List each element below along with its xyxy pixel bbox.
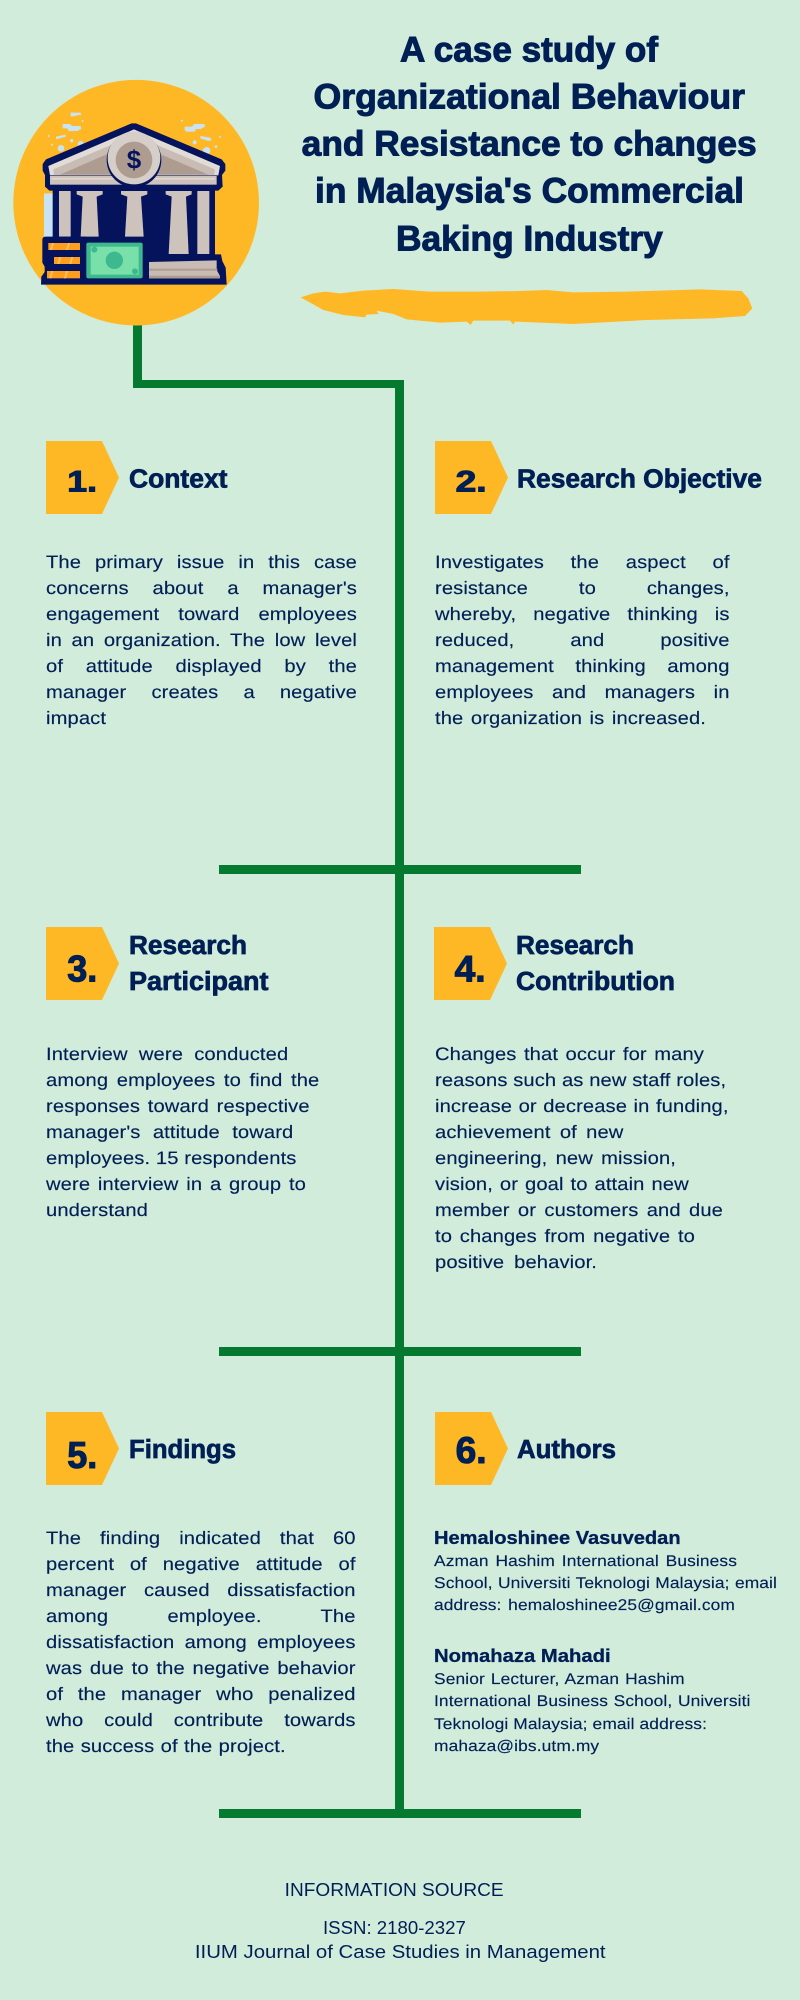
title: Organizational Behaviour xyxy=(314,77,745,116)
text: research participant body: among employees to find the xyxy=(46,1070,319,1090)
footer: information source: IIUM Journal of Case Studies in Management xyxy=(195,1942,606,1962)
text: research participant body: were interview in a group to xyxy=(46,1174,306,1194)
text: second author affiliation: International Business School, Universiti xyxy=(434,1693,750,1710)
text: research contribution body: Changes that occur for many xyxy=(435,1044,704,1064)
icon: columns xyxy=(59,191,209,254)
panel: research objective xyxy=(434,441,762,728)
icon: dollar medallion: $ xyxy=(127,145,142,175)
panel: findings xyxy=(46,1412,356,1756)
text: research participant body: manager's attitude toward xyxy=(46,1122,293,1142)
text: research participant body xyxy=(46,1044,319,1220)
footer: information source: ISSN: 2180-2327 xyxy=(323,1918,466,1938)
panel: authors xyxy=(434,1412,777,1755)
text: findings body: among employee. The xyxy=(46,1606,356,1626)
text: research participant body: responses toward respective xyxy=(46,1096,310,1116)
badge: number 1: 1. xyxy=(67,466,97,499)
heading: Research Objective: Research Objective xyxy=(517,466,762,494)
text: context body: impact xyxy=(46,708,106,728)
panel: context xyxy=(46,441,357,728)
text: research participant body: understand xyxy=(46,1200,148,1220)
text: first author affiliation xyxy=(434,1553,777,1614)
heading: Research Contribution xyxy=(516,932,675,996)
text: research contribution body: positive behavior. xyxy=(435,1252,597,1272)
text: research objective body: employees and managers in xyxy=(435,682,730,702)
text: context body: of attitude displayed by the xyxy=(46,656,357,676)
text: research objective body xyxy=(434,552,730,728)
heading: Authors: Authors xyxy=(517,1436,616,1464)
badge: number 2: 2. xyxy=(456,466,487,499)
text: research objective body: reduced, and positive xyxy=(435,630,730,650)
badge: number 5: 5. xyxy=(67,1435,97,1476)
icon: steps xyxy=(149,260,220,278)
heading: Research Contribution: Contribution xyxy=(516,968,675,996)
badge: number 4: 4. xyxy=(455,949,486,990)
text: context body: The primary issue in this case xyxy=(46,552,357,572)
icon: dollar medallion xyxy=(107,132,161,187)
text: research contribution body: increase or decrease in funding, xyxy=(435,1096,729,1116)
heading: Findings: Findings xyxy=(129,1436,236,1464)
footer: information source: INFORMATION SOURCE xyxy=(285,1880,504,1900)
text: research contribution body: member or customers and due xyxy=(435,1200,723,1220)
text: context body: manager creates a negative xyxy=(46,682,357,702)
title: and Resistance to changes xyxy=(302,125,757,164)
text: context body xyxy=(46,552,357,728)
icon: base with money xyxy=(41,237,227,285)
text: second author affiliation: Senior Lecturer, Azman Hashim xyxy=(434,1671,685,1688)
text: findings body: percent of negative attitude of xyxy=(46,1554,356,1574)
text: context body: engagement toward employees xyxy=(46,604,357,624)
text: research objective body: resistance to changes, xyxy=(435,578,730,598)
text: research contribution body: engineering, new mission, xyxy=(435,1148,676,1168)
icon: small clouds xyxy=(44,113,221,238)
badge: number 3 xyxy=(46,927,119,1000)
author name: Hemaloshinee Vasuvedan: Hemaloshinee Vasuvedan xyxy=(434,1528,681,1548)
heading: Context: Context xyxy=(129,466,228,494)
icon: coin stack xyxy=(47,243,80,278)
text: findings body: The finding indicated that 60 xyxy=(46,1528,356,1548)
text: research objective body: management thinking among xyxy=(435,656,730,676)
brush stroke underline xyxy=(300,289,752,325)
text: research contribution body xyxy=(435,1044,729,1272)
icon: banknote xyxy=(86,243,143,278)
text: research objective body: whereby, negative thinking is xyxy=(435,604,730,624)
text: first author affiliation: School, Universiti Teknologi Malaysia; email xyxy=(434,1575,777,1592)
text: second author affiliation xyxy=(434,1671,750,1755)
heading: Research Contribution: Research xyxy=(516,932,634,960)
heading: Research Participant xyxy=(129,932,269,996)
panel: research participant xyxy=(46,927,319,1220)
text: research participant body: employees. 15 respondents xyxy=(46,1148,296,1168)
text: first author affiliation: Azman Hashim International Business xyxy=(434,1553,737,1570)
text: research contribution body: to changes from negative to xyxy=(435,1226,695,1246)
text: findings body: of the manager who penalized xyxy=(46,1684,356,1704)
icon: columns backing xyxy=(53,188,215,260)
text: first author affiliation: address: hemaloshinee25@gmail.com xyxy=(434,1597,735,1614)
text: research objective body: the organization is increased. xyxy=(435,708,706,728)
badge: number 6: 6. xyxy=(456,1430,487,1471)
title: in Malaysia's Commercial xyxy=(315,172,744,211)
footer: information source xyxy=(195,1880,606,1962)
text: context body: in an organization. The low level xyxy=(46,630,357,650)
title xyxy=(302,31,757,259)
heading: Research Participant: Research xyxy=(129,932,247,960)
badge: number 5 xyxy=(46,1412,119,1485)
title: A case study of xyxy=(400,31,658,70)
icon: roof pediment xyxy=(43,123,225,191)
title: Baking Industry xyxy=(396,220,663,259)
badge: number 6 xyxy=(435,1412,508,1485)
panel: research contribution xyxy=(434,927,729,1272)
badge: number 4 xyxy=(434,927,507,1000)
text: findings body xyxy=(46,1528,356,1756)
text: research contribution body: achievement of new xyxy=(435,1122,623,1142)
text: research contribution body: reasons such as new staff roles, xyxy=(435,1070,726,1090)
text: findings body: was due to the negative behavior xyxy=(46,1658,356,1678)
badge: number 3: 3. xyxy=(67,949,97,990)
icon: bank building on yellow circle xyxy=(13,80,259,326)
text: second author affiliation: Teknologi Malaysia; email address: xyxy=(434,1716,707,1733)
text: research contribution body: vision, or goal to attain new xyxy=(435,1174,689,1194)
text: context body: concerns about a manager's xyxy=(46,578,357,598)
text: findings body: manager caused dissatisfaction xyxy=(46,1580,356,1600)
badge: number 1 xyxy=(46,441,119,514)
text: findings body: the success of the project. xyxy=(46,1736,286,1756)
text: second author affiliation: mahaza@ibs.utm.my xyxy=(434,1738,599,1755)
badge: number 2 xyxy=(435,441,508,514)
text: research participant body: Interview were conducted xyxy=(46,1044,288,1064)
heading: Research Participant: Participant xyxy=(129,968,269,996)
text: research objective body: Investigates the aspect of xyxy=(435,552,730,572)
author name: Nomahaza Mahadi: Nomahaza Mahadi xyxy=(434,1646,611,1666)
text: findings body: who could contribute towards xyxy=(46,1710,356,1730)
text: findings body: dissatisfaction among employees xyxy=(46,1632,356,1652)
